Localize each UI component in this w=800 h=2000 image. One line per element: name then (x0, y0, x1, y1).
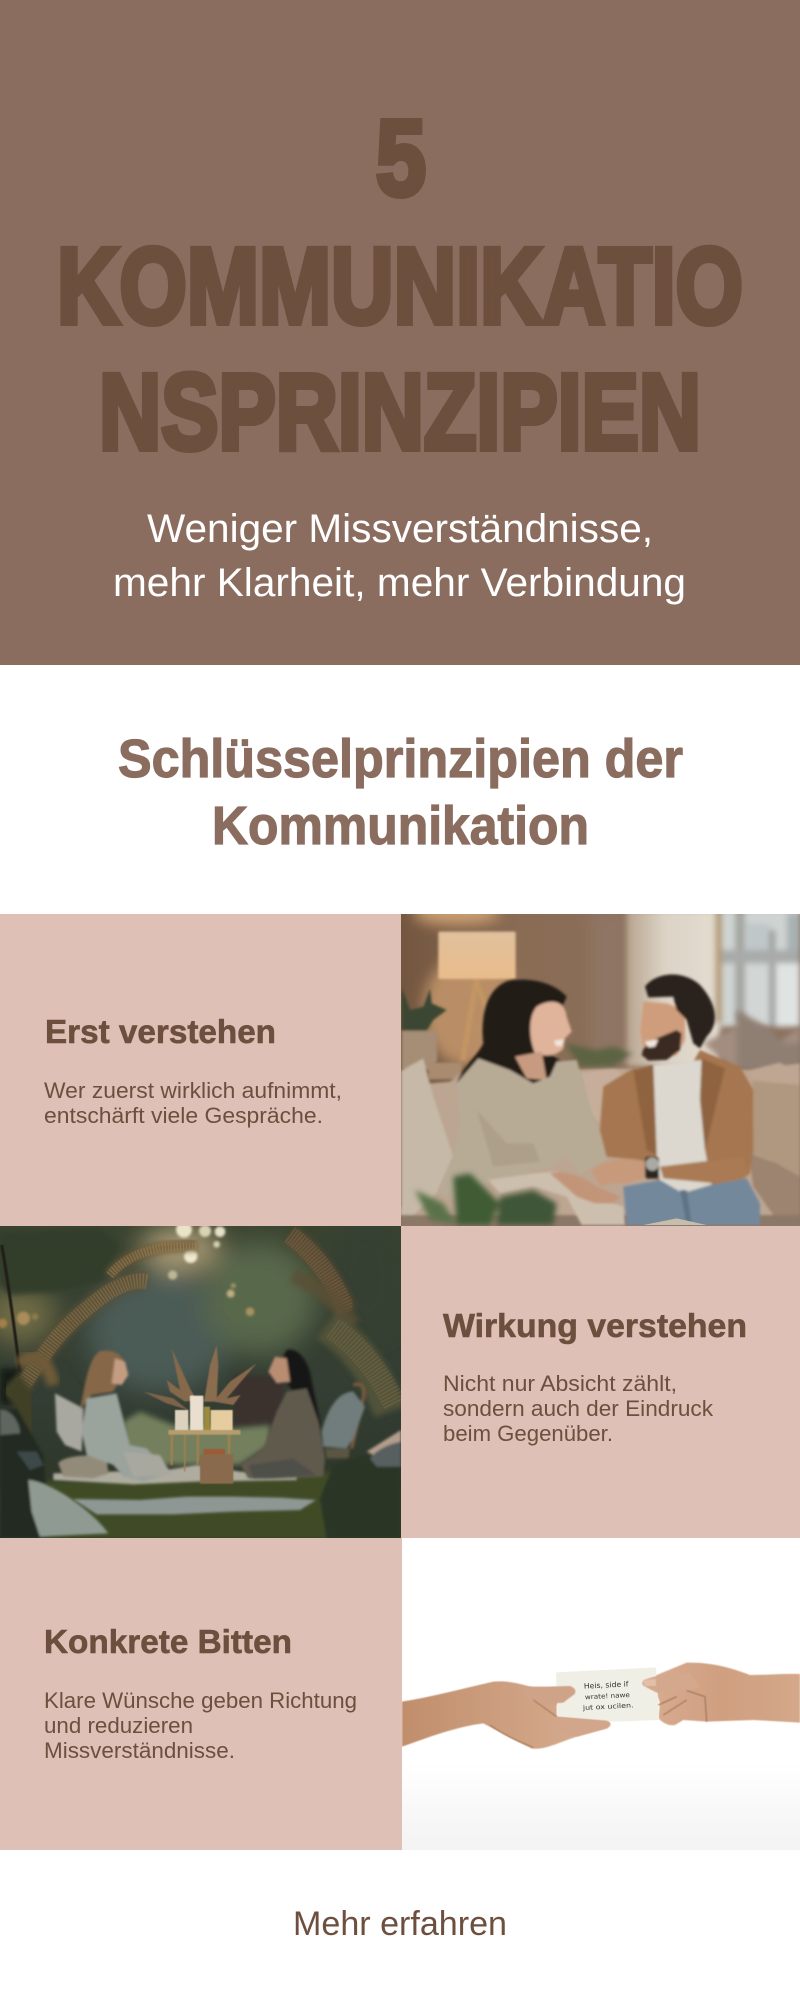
note card: Heis, side if (584, 1679, 629, 1691)
woman right (241, 1350, 365, 1479)
panel: Konkrete Bitten (0, 1538, 402, 1850)
card body text: beim Gegenüber. (443, 1421, 613, 1446)
heading: Schlüsselprinzipien der Kommunikation: Kommunikation (212, 796, 589, 856)
card title: Konkrete Bitten (44, 1623, 292, 1660)
card body text: und reduzieren (44, 1713, 193, 1738)
title: 5 Kommunikationsprinzipien: 5 (376, 97, 426, 218)
right plume (290, 1235, 395, 1412)
woman left (55, 1351, 172, 1482)
card title: Erst verstehen (45, 1013, 276, 1050)
note card (556, 1667, 659, 1722)
photo: couple talking on sofa (401, 914, 800, 1226)
woman (437, 980, 625, 1225)
call to action: Mehr erfahren: Mehr erfahren (293, 1905, 507, 1943)
panel: Erst verstehen (0, 914, 401, 1226)
title: 5 Kommunikationsprinzipien (57, 97, 743, 472)
foreground foliage and pillows (0, 1408, 401, 1538)
left plume (2, 1245, 197, 1452)
mat and blanket (53, 1465, 316, 1514)
left hand (402, 1681, 610, 1749)
panel: Wirkung verstehen (401, 1226, 800, 1538)
card body text (443, 1371, 714, 1446)
subtitle: mehr Klarheit, mehr Verbindung (113, 561, 686, 605)
table with candles and dried plant (143, 1345, 257, 1484)
subtitle: Weniger Missverständnisse, (147, 507, 653, 551)
card body text (44, 1078, 342, 1128)
man (592, 975, 760, 1225)
photo: two women in a garden with candles (0, 1226, 401, 1538)
note card: jut ox ucilen. (582, 1701, 634, 1712)
subtitle (113, 507, 686, 605)
foreground plant (415, 1173, 557, 1225)
card body text (44, 1688, 357, 1763)
right hand (642, 1663, 800, 1725)
note card: wrate! nawe (585, 1691, 630, 1701)
card body text: Missverständnisse. (44, 1738, 235, 1763)
card body text: entschärft viele Gespräche. (44, 1103, 323, 1128)
card body text: Klare Wünsche geben Richtung (44, 1688, 357, 1713)
panel: header (0, 0, 800, 665)
card body text: Nicht nur Absicht zählt, (443, 1371, 677, 1396)
card body text: Wer zuerst wirklich aufnimmt, (44, 1078, 342, 1103)
heading: Schlüsselprinzipien der Kommunikation: Schlüsselprinzipien der (118, 729, 683, 789)
heading: Schlüsselprinzipien der Kommunikation (118, 729, 683, 856)
fingers over card (490, 1673, 707, 1747)
card title: Wirkung verstehen (443, 1307, 747, 1344)
grass ground (0, 1412, 401, 1540)
photo: two hands passing a note card (402, 1662, 800, 1850)
card body text: sondern auch der Eindruck (443, 1396, 714, 1421)
